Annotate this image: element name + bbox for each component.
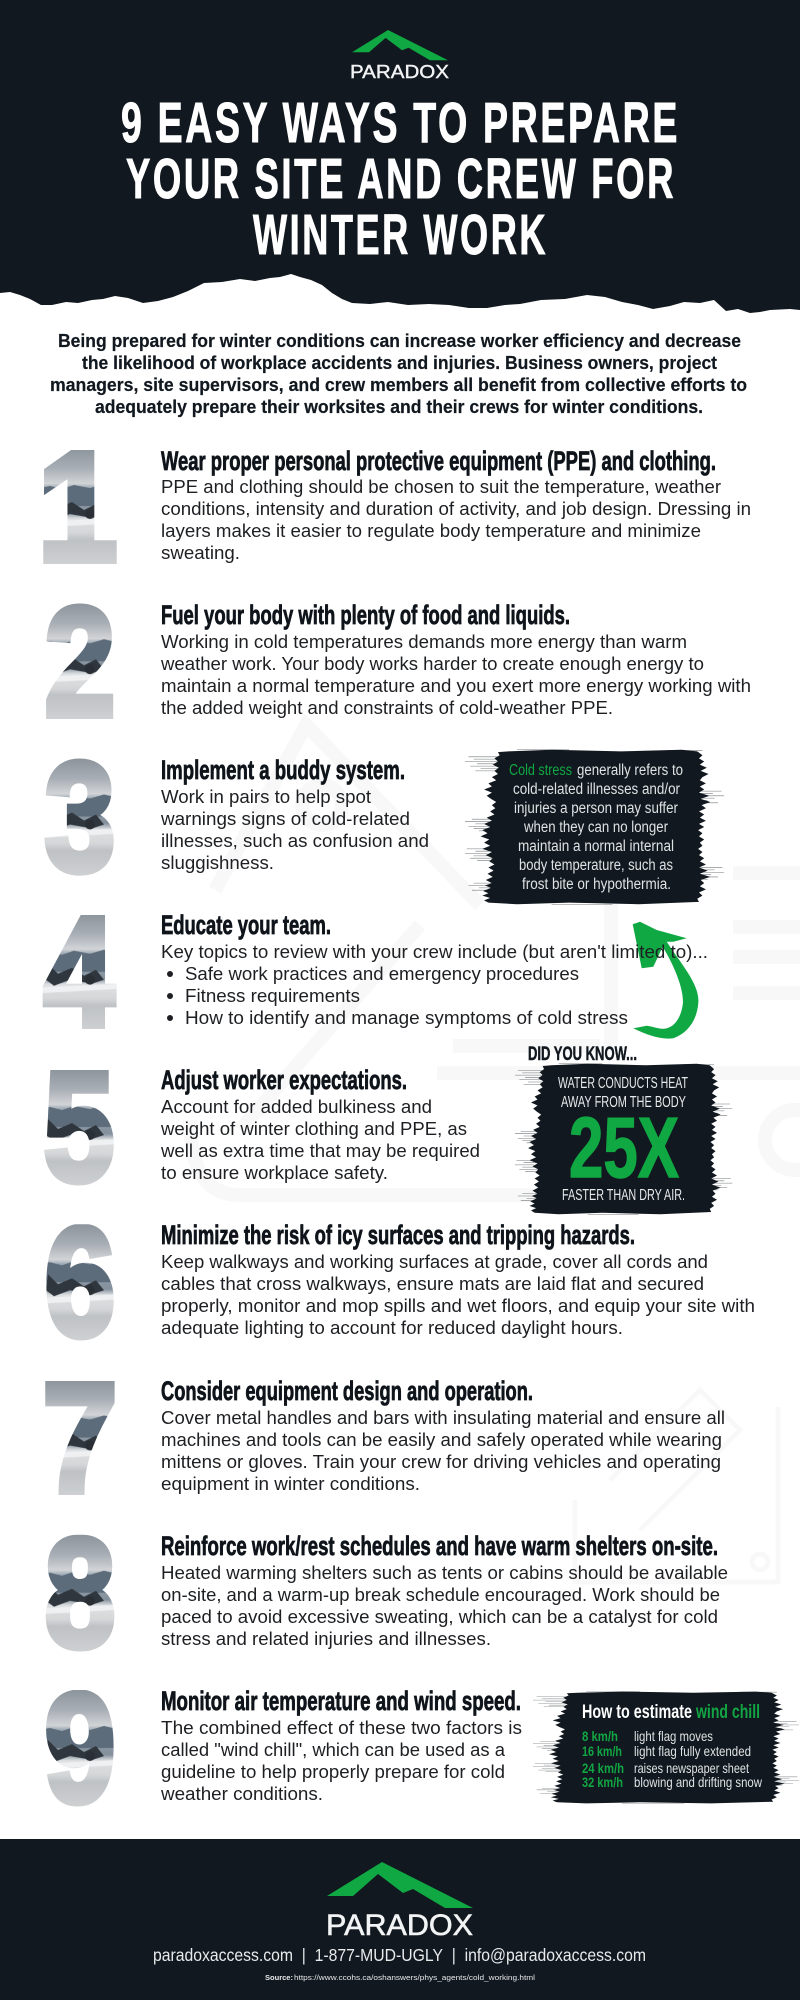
big stat 25X: 25X <box>569 1101 679 1196</box>
body 7: Cover metal handles and bars with insulating material and ensure all <box>161 1407 725 1428</box>
body 9: The combined effect of these two factors is <box>161 1717 522 1738</box>
callout: cold stress: body temperature, such as <box>519 857 673 874</box>
contact line: paradoxaccess.com | 1-877-MUD-UGLY | info@paradoxaccess.com <box>153 1945 646 1965</box>
callout: wind chill table: light flag moves <box>634 1728 713 1744</box>
body 9: called "wind chill", which can be used as a <box>161 1739 506 1760</box>
callout: cold stress: frost bite or hypothermia. <box>522 876 671 893</box>
intro paragraph <box>50 330 747 417</box>
body 4 with bullet list: Safe work practices and emergency procedures <box>185 963 579 984</box>
heading 2: Fuel your body with plenty of food and liquids. <box>161 600 570 630</box>
callout: cold stress: cold-related illnesses and/or <box>513 781 680 798</box>
arrow: cold stress callout pointer <box>633 922 698 1039</box>
intro paragraph: the likelihood of workplace accidents and injuries. Business owners, project <box>82 352 717 373</box>
body 5: Account for added bulkiness and <box>161 1096 432 1117</box>
body 9: guideline to help properly prepare for cold <box>161 1761 505 1782</box>
body 3: sluggishness. <box>161 852 274 873</box>
footer logo wordmark: PARADOX <box>326 1909 473 1942</box>
step 9 <box>45 1662 522 1834</box>
callout: cold stress: generally refers to <box>577 762 683 779</box>
heading 9: Monitor air temperature and wind speed. <box>161 1686 521 1716</box>
callout: wind chill table: wind chill <box>695 1702 760 1723</box>
number 2: 2 <box>45 576 115 748</box>
body 5: well as extra time that may be required <box>160 1140 480 1161</box>
body 4 with bullet list: Fitness requirements <box>185 985 360 1006</box>
callout: wind chill table: blowing and drifting snow <box>634 1774 763 1790</box>
body 6: properly, monitor and mop spills and wet floors, and equip your site with <box>161 1295 755 1316</box>
callout: cold stress: Cold stress <box>509 762 572 779</box>
body 8: on-site, and a warm-up break schedule encouraged. Work should be <box>161 1584 720 1605</box>
callout: wind chill table: 16 km/h <box>582 1743 622 1759</box>
body 5: to ensure workplace safety. <box>161 1162 388 1183</box>
body 7: equipment in winter conditions. <box>161 1473 420 1494</box>
body 4 with bullet list: Key topics to review with your crew include (but aren't limited to)... <box>161 941 708 962</box>
title: WINTER WORK <box>253 203 548 266</box>
background watermark: house and tools icon <box>190 725 800 1582</box>
body 2 <box>160 631 751 718</box>
number 7: 7 <box>43 1352 117 1524</box>
body 2: Working in cold temperatures demands more energy than warm <box>161 631 687 652</box>
step 6 <box>45 1196 755 1368</box>
callout: wind chill table: light flag fully extended <box>634 1743 751 1759</box>
body 1: PPE and clothing should be chosen to suit the temperature, weather <box>161 476 721 497</box>
callout: wind chill table: raises newspaper sheet <box>634 1760 749 1776</box>
header band with torn edge <box>0 0 800 313</box>
source line: https://www.ccohs.ca/oshanswers/phys_agents/cold_working.html <box>294 1973 535 1982</box>
callout: cold stress <box>465 750 724 904</box>
number 3: 3 <box>45 731 115 903</box>
heading 7: Consider equipment design and operation. <box>161 1376 533 1406</box>
step 2 <box>45 576 751 748</box>
step 4 <box>44 886 708 1058</box>
number 5: 5 <box>44 1041 114 1213</box>
body 2: weather work. Your body works harder to create enough energy to <box>160 653 704 674</box>
callout heading: How to estimate <box>582 1702 692 1723</box>
heading 3: Implement a buddy system. <box>161 755 405 785</box>
body 6: cables that cross walkways, ensure mats are laid flat and secured <box>161 1273 704 1294</box>
number 4: 4 <box>44 886 114 1058</box>
callout: did you know: WATER CONDUCTS HEAT <box>558 1075 688 1092</box>
body 6 <box>161 1251 755 1338</box>
footer logo mountain <box>327 1862 473 1908</box>
title <box>121 91 680 266</box>
body 8: paced to avoid excessive sweating, which can be a catalyst for cold <box>161 1606 718 1627</box>
step 1 <box>38 421 751 593</box>
heading 4: Educate your team. <box>161 910 331 940</box>
callout: did you know: FASTER THAN DRY AIR. <box>562 1187 685 1204</box>
body 9 <box>160 1717 522 1804</box>
top logo <box>350 30 449 82</box>
intro paragraph: adequately prepare their worksites and their crews for winter conditions. <box>95 396 703 417</box>
callout: cold stress: maintain a normal internal <box>518 838 674 855</box>
body 7: machines and tools can be easily and safely operated while wearing <box>161 1429 722 1450</box>
source line: Source: <box>265 1973 293 1982</box>
intro paragraph: Being prepared for winter conditions can increase worker efficiency and decrease <box>58 330 741 351</box>
body 6: Keep walkways and working surfaces at grade, cover all cords and <box>161 1251 708 1272</box>
body 8: stress and related injuries and illnesses. <box>161 1628 491 1649</box>
body 7 <box>161 1407 725 1494</box>
wind speed rows: 8 km/h <box>582 1728 618 1744</box>
heading 5: Adjust worker expectations. <box>161 1065 407 1095</box>
logo mountain icon <box>352 30 448 60</box>
intro paragraph: managers, site supervisors, and crew members all benefit from collective efforts to <box>50 374 747 395</box>
body 1: sweating. <box>161 542 240 563</box>
step 7 <box>43 1352 725 1524</box>
callout label: DID YOU KNOW... <box>528 1044 637 1065</box>
body 1: layers makes it easier to regulate body temperature and minimize <box>161 520 701 541</box>
body 9: weather conditions. <box>160 1783 323 1804</box>
body 1 <box>161 476 751 563</box>
body 5 <box>160 1096 480 1183</box>
body 2: maintain a normal temperature and you exert more energy working with <box>161 675 751 696</box>
step 8 <box>45 1507 728 1679</box>
step 3 <box>45 731 429 903</box>
callout: cold stress: when they can no longer <box>523 819 668 836</box>
body 3: warnings signs of cold-related <box>160 808 410 829</box>
number 1: 1 <box>38 421 117 593</box>
body 4 with bullet list: How to identify and manage symptoms of cold stress <box>185 1007 628 1028</box>
callout: did you know <box>515 1044 732 1214</box>
body 1: conditions, intensity and duration of activity, and job design. Dressing in <box>161 498 751 519</box>
body 3: Work in pairs to help spot <box>161 786 371 807</box>
body 3 <box>160 786 429 873</box>
footer <box>0 1839 800 2000</box>
number 8: 8 <box>45 1507 115 1679</box>
body 3: illnesses, such as confusion and <box>161 830 429 851</box>
body 8 <box>161 1562 728 1649</box>
callout: cold stress: injuries a person may suffer <box>514 800 678 817</box>
body 6: adequate lighting to account for reduced daylight hours. <box>161 1317 623 1338</box>
callout: wind chill table: 32 km/h <box>582 1774 623 1790</box>
body 2: the added weight and constraints of cold-weather PPE. <box>161 697 613 718</box>
body 4 with bullet list <box>161 941 708 1028</box>
callout: did you know: AWAY FROM THE BODY <box>561 1094 686 1111</box>
logo wordmark: PARADOX <box>350 61 449 82</box>
step 5 <box>44 1041 480 1213</box>
number 6: 6 <box>45 1196 115 1368</box>
body 5: weight of winter clothing and PPE, as <box>160 1118 467 1139</box>
callout: wind chill table <box>533 1692 799 1803</box>
callout: wind chill table: 24 km/h <box>582 1760 624 1776</box>
number 9: 9 <box>45 1662 115 1834</box>
body 8: Heated warming shelters such as tents or cabins should be available <box>161 1562 728 1583</box>
body 7: mittens or gloves. Train your crew for driving vehicles and operating <box>161 1451 721 1472</box>
